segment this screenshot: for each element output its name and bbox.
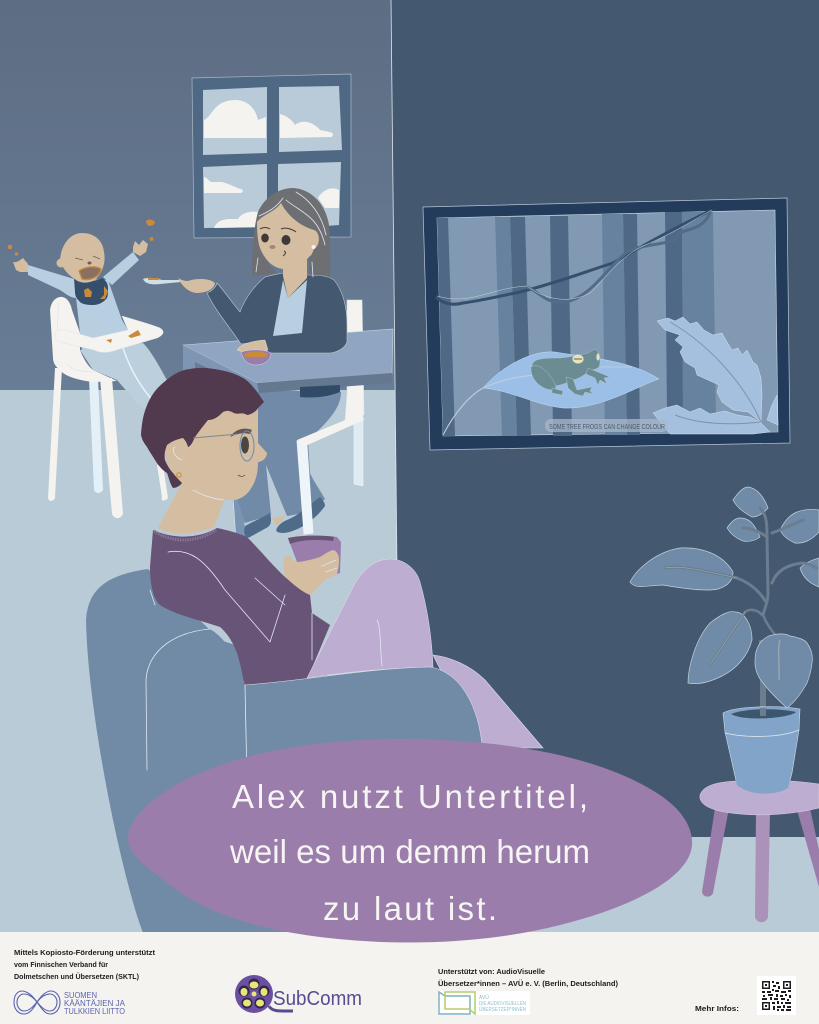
baby in high chair bbox=[8, 219, 168, 518]
high chair legs bbox=[48, 368, 62, 501]
window with clouds bbox=[192, 74, 351, 238]
baby arms bbox=[28, 252, 139, 298]
woman's hair bbox=[252, 188, 330, 279]
forest stripes bbox=[437, 212, 683, 436]
woman's hand bbox=[178, 278, 215, 293]
Alex's neck bbox=[158, 483, 225, 534]
Alex's smile bbox=[238, 475, 245, 476]
Alex's ear and earring bbox=[173, 447, 182, 477]
funding note: Kopiosto: vom Finnischen Verband für bbox=[14, 960, 108, 969]
woman feeding the baby bbox=[143, 188, 347, 365]
Alex bbox=[141, 368, 543, 748]
high chair tray bbox=[55, 316, 163, 352]
flying food bbox=[8, 219, 155, 256]
QR code bbox=[757, 976, 796, 1015]
funding note: Kopiosto bbox=[14, 948, 155, 981]
baby bib bbox=[74, 278, 108, 305]
lower plant leaf bbox=[755, 634, 812, 708]
woman's lower hand bbox=[237, 340, 268, 354]
vines bbox=[437, 210, 712, 304]
bubble text: zu laut ist. bbox=[323, 890, 497, 927]
woman's shirt bbox=[273, 280, 307, 336]
funding note: Kopiosto: Dolmetschen und Übersetzen (SKTL) bbox=[14, 972, 139, 981]
logo: AVÜ: DIE AUDIOVISUELLEN bbox=[479, 1001, 526, 1007]
frog leaf bbox=[443, 352, 659, 435]
footer band bbox=[0, 932, 819, 1024]
woman's chair bbox=[297, 300, 364, 534]
woman's trousers and shoes bbox=[236, 390, 341, 538]
bubble text: Alex nutzt Untertitel, bbox=[232, 778, 588, 815]
Alex's hair bbox=[141, 368, 264, 488]
baby legs bbox=[80, 343, 167, 410]
bubble text bbox=[229, 778, 590, 927]
plant leaves bbox=[630, 487, 819, 684]
plant stems bbox=[665, 508, 817, 665]
caption pill on screen: SOME TREE FROGS CAN CHANGE COLOUR bbox=[549, 422, 665, 431]
logo: AVÜ bbox=[438, 991, 530, 1015]
woman's hair strands bbox=[256, 192, 326, 277]
left armrest bbox=[146, 629, 247, 935]
speech bubble bbox=[128, 739, 692, 942]
mug bbox=[288, 536, 341, 575]
television screen bbox=[437, 210, 778, 436]
bubble text: weil es um demm herum bbox=[229, 833, 590, 870]
plant stem behind leaves bbox=[762, 640, 763, 716]
logo: SKTL bbox=[14, 990, 125, 1016]
baby face with food bbox=[75, 256, 101, 280]
logo: SKTL: TULKKIEN LIITTO bbox=[64, 1006, 125, 1016]
logo: AVÜ: ÜBERSETZER*INNEN bbox=[479, 1006, 526, 1013]
Alex's raised leg bbox=[307, 559, 433, 678]
blanket over foot bbox=[433, 655, 543, 748]
potted plant bbox=[630, 487, 819, 794]
armchair back bbox=[86, 569, 481, 935]
funding note: AVÜ: Übersetzer*innen – AVÜ e. V. (Berlin, Deutschland) bbox=[438, 979, 618, 988]
baby hands bbox=[13, 240, 148, 272]
stool bbox=[700, 780, 819, 922]
baby head bbox=[56, 233, 105, 283]
floor bbox=[0, 390, 819, 935]
woman's face bbox=[257, 203, 319, 269]
television frame bbox=[423, 198, 790, 450]
funding note: AVÜ: Unterstützt von: AudioVisuelle bbox=[438, 967, 545, 976]
right room wall bbox=[391, 0, 819, 837]
spoon bbox=[143, 278, 181, 284]
caption pill on screen bbox=[545, 419, 668, 432]
funding note: Kopiosto: Mittels Kopiosto-Förderung unterstützt bbox=[14, 948, 155, 957]
logo: SKTL: KÄÄNTÄJIEN JA bbox=[64, 998, 125, 1008]
left room wall bbox=[0, 0, 395, 391]
Alex's jaw line bbox=[193, 490, 224, 500]
Alex's hand bbox=[284, 550, 339, 595]
woman's neck bbox=[283, 258, 307, 298]
table leg bbox=[233, 495, 246, 540]
Alex's glasses and eye bbox=[193, 429, 262, 461]
logo: SKTL: SUOMEN bbox=[64, 990, 97, 1000]
woman's eyes and nose bbox=[260, 228, 316, 256]
bowl with food bbox=[241, 350, 271, 365]
logo: SubComm bbox=[235, 975, 362, 1013]
Alex's sweater bbox=[150, 528, 330, 690]
television bbox=[423, 198, 790, 450]
logo: AVÜ: AVÜ bbox=[479, 994, 489, 1001]
large leaves bbox=[653, 317, 778, 434]
armchair front bbox=[146, 590, 482, 940]
tree frog bbox=[531, 349, 610, 396]
right armrest bbox=[245, 667, 482, 940]
high chair back bbox=[50, 297, 117, 382]
Alex's face bbox=[165, 405, 267, 500]
table bbox=[183, 329, 393, 397]
woman's jacket bbox=[207, 273, 347, 353]
logo: SubComm: SubComm bbox=[273, 988, 362, 1010]
flower pot bbox=[723, 707, 800, 794]
more info label: Mehr Infos: bbox=[695, 1004, 739, 1013]
funding note: AVÜ bbox=[438, 967, 618, 988]
sweater collar bbox=[154, 530, 216, 540]
baby body bbox=[74, 279, 128, 350]
